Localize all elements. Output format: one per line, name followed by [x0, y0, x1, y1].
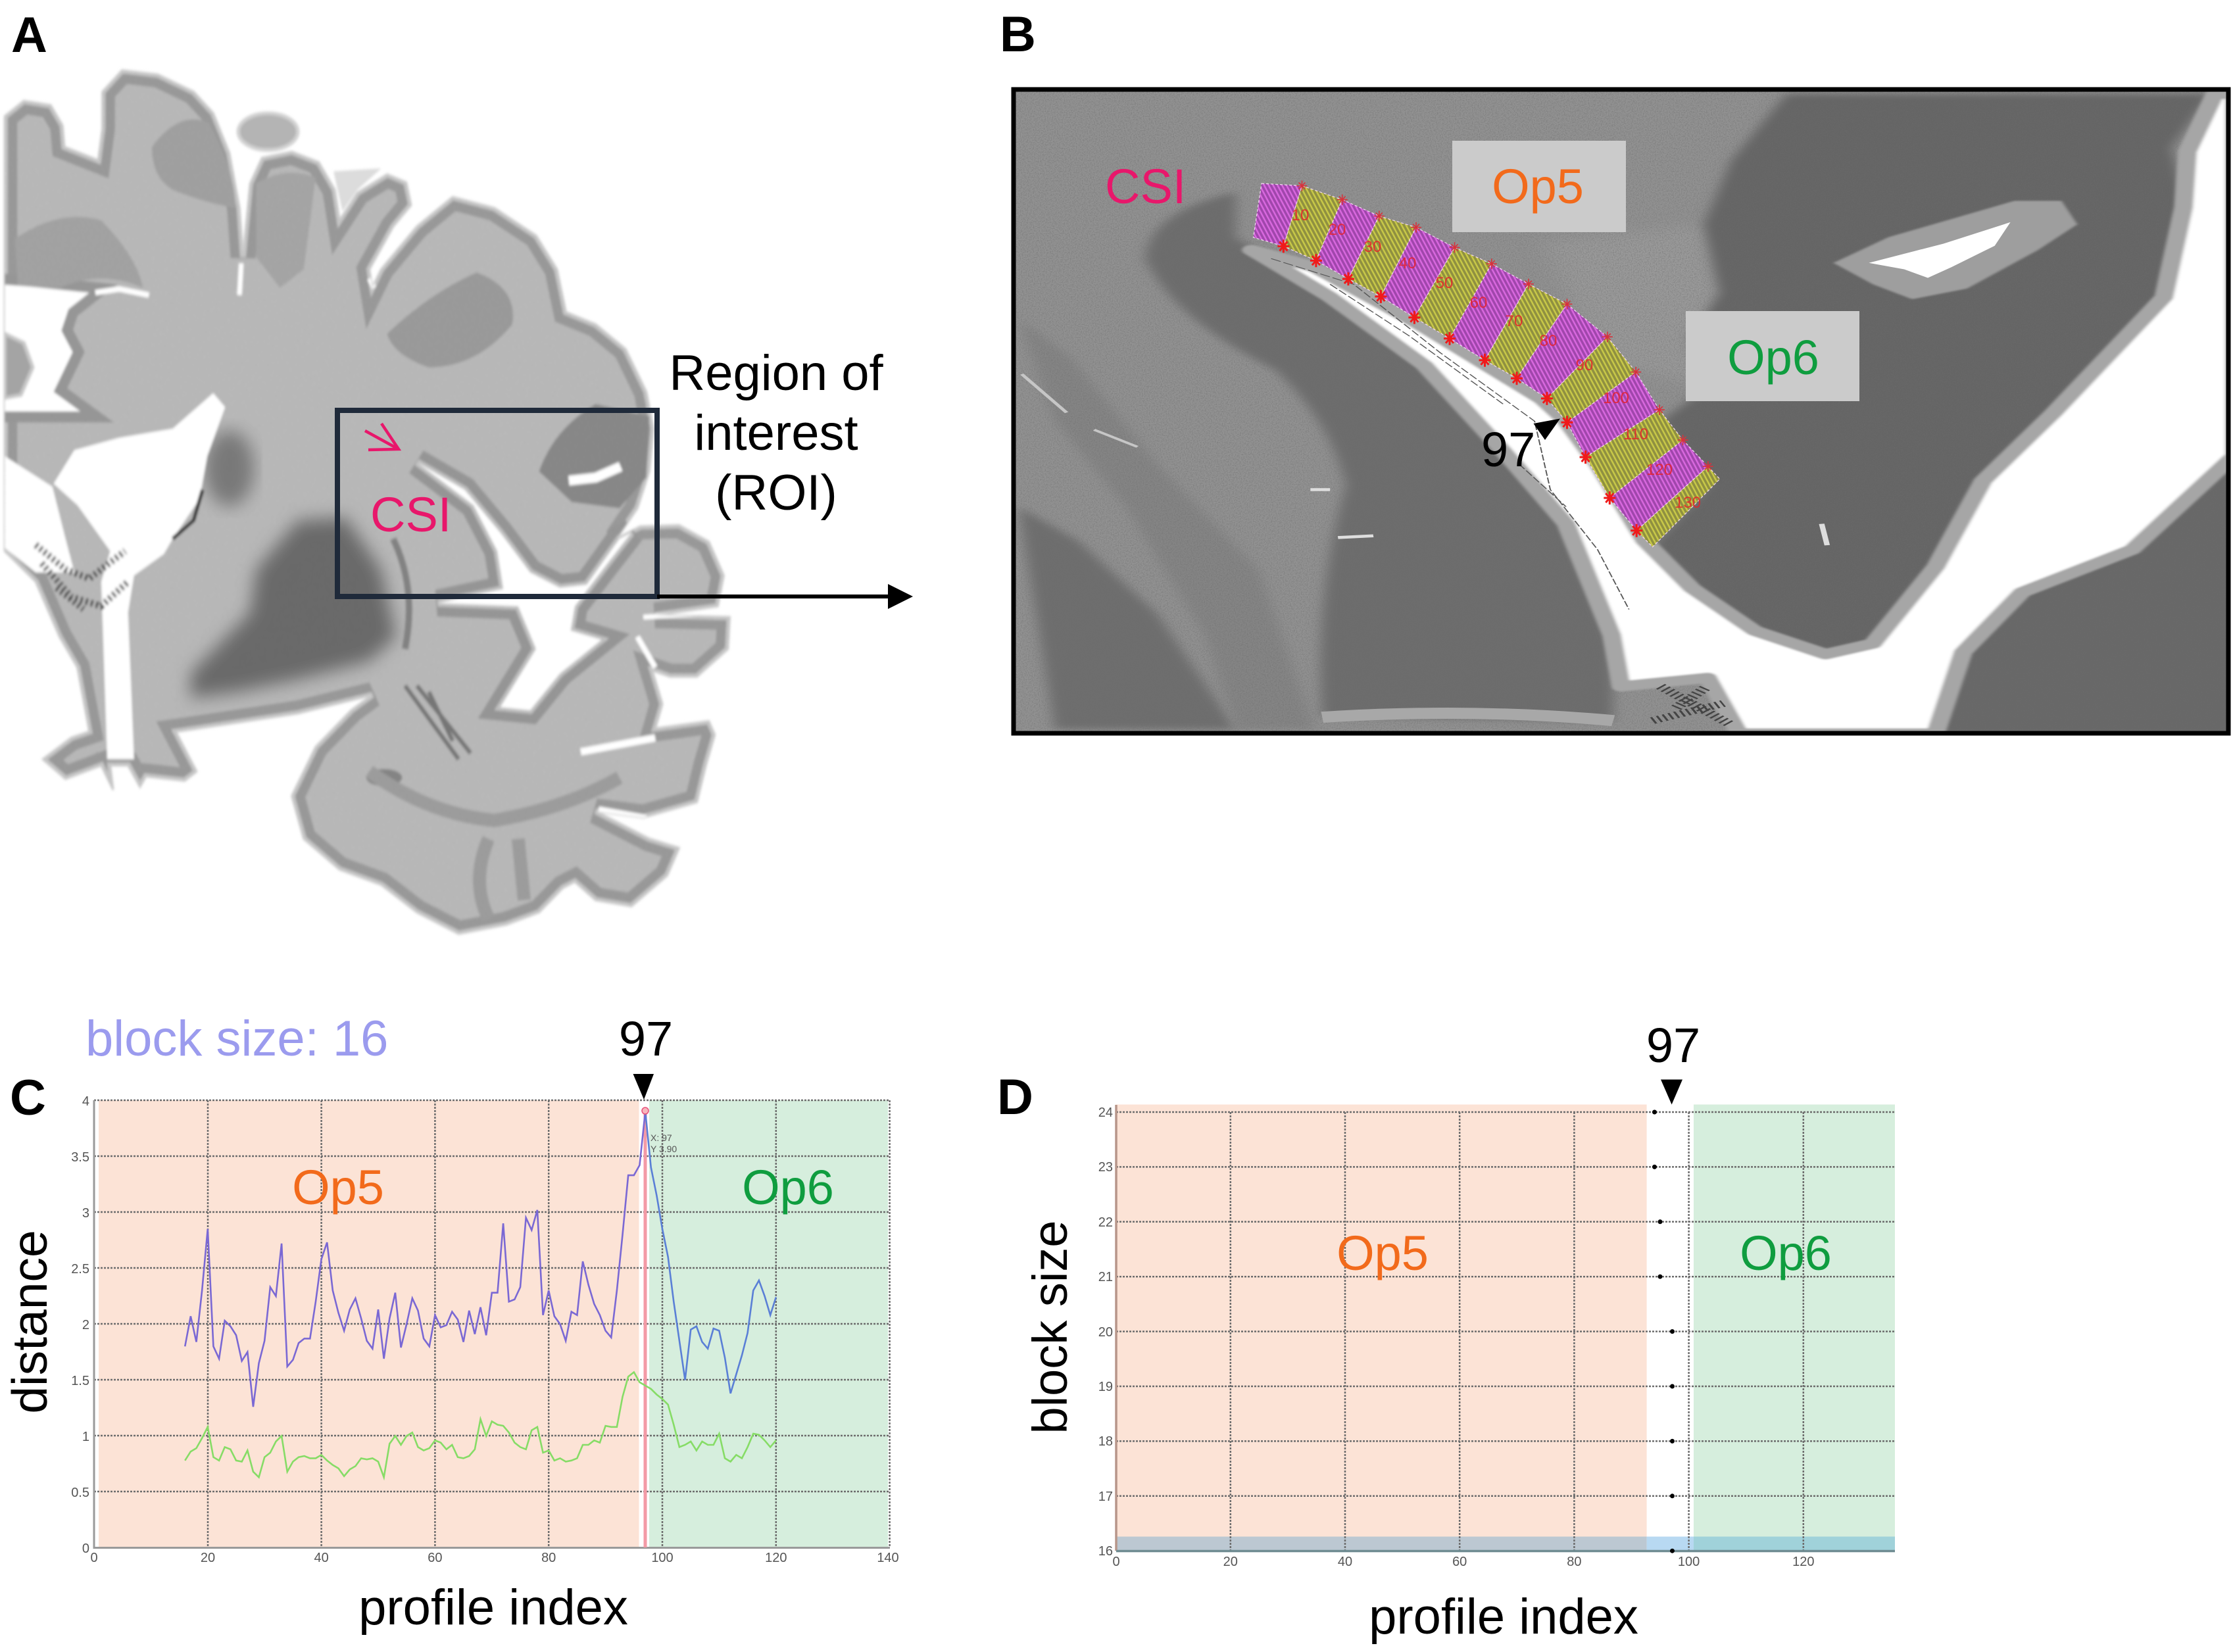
y tick labels: 2	[82, 1318, 89, 1332]
y axis title: distance	[2, 1230, 57, 1414]
y tick labels	[71, 1094, 89, 1556]
stripe index numbers: 130	[1675, 494, 1701, 512]
y tick labels: 20	[1098, 1325, 1113, 1340]
peak data tip: X: 97	[650, 1132, 672, 1143]
y tick labels: 16	[1098, 1544, 1113, 1559]
label: CSI: CSI	[1105, 159, 1186, 214]
label box: Op5	[1452, 141, 1626, 232]
profile stripes overlay	[1254, 183, 1720, 547]
peak data tip: Y 3.90	[650, 1144, 677, 1154]
panel C: distance versus profile index chart	[2, 1011, 899, 1636]
x tick labels: 0	[90, 1551, 98, 1565]
peak marker	[642, 1107, 649, 1114]
stripe index numbers: 40	[1399, 255, 1416, 272]
label box: Op5: Op5	[1492, 159, 1584, 214]
blue distance line, Op6 side	[645, 1111, 776, 1394]
Op5 region shading	[99, 1100, 639, 1547]
x tick labels: 120	[765, 1551, 787, 1565]
x tick labels: 60	[1452, 1555, 1467, 1569]
stripe index numbers: 70	[1506, 312, 1523, 330]
label: 97 with pointer	[619, 1011, 673, 1100]
stripe index numbers: 10	[1292, 206, 1309, 224]
x axis title: profile index	[358, 1580, 628, 1636]
y tick labels: 3.5	[71, 1150, 89, 1165]
panel letter C: C	[10, 1070, 46, 1126]
region label: Op5: Op5	[1337, 1226, 1429, 1280]
magnified histology image	[1014, 89, 2233, 733]
panel letter A: A	[11, 7, 47, 63]
region label: Op6: Op6	[1740, 1226, 1832, 1280]
label: Region of interest (ROI): (ROI)	[715, 465, 837, 521]
blue distance line, Op5 side	[185, 1111, 645, 1407]
y axis title: block size	[1023, 1221, 1077, 1434]
stripe index numbers: 60	[1470, 294, 1487, 312]
label: CSI: CSI	[370, 487, 451, 542]
x tick labels	[90, 1551, 899, 1565]
stripe index numbers: 80	[1540, 332, 1557, 350]
panel letter B: B	[1000, 7, 1036, 62]
label: Region of interest (ROI): Region of	[669, 345, 884, 401]
chart axes	[94, 1100, 890, 1548]
region label: Op5: Op5	[292, 1160, 384, 1215]
x tick labels: 100	[651, 1551, 674, 1565]
stripe index numbers: 110	[1623, 425, 1648, 443]
Op5 region shading	[1116, 1105, 1647, 1551]
y tick labels: 0.5	[71, 1486, 89, 1500]
label box: Op6	[1686, 311, 1859, 401]
stripe index numbers: 30	[1364, 238, 1381, 256]
label box: Op6: Op6	[1727, 330, 1819, 385]
x tick labels: 100	[1678, 1555, 1700, 1569]
y tick labels: 21	[1098, 1270, 1113, 1284]
y tick labels: 17	[1098, 1490, 1113, 1504]
y tick labels: 23	[1098, 1160, 1113, 1175]
chart grid	[1116, 1112, 1895, 1551]
panel B frame	[1014, 89, 2228, 733]
x tick labels: 0	[1112, 1555, 1120, 1569]
x tick labels: 20	[1223, 1555, 1238, 1569]
stripe index numbers	[1292, 206, 1701, 512]
x tick labels: 140	[877, 1551, 899, 1565]
panel A: brain section with region of interest	[0, 7, 913, 949]
stripe index numbers: 90	[1576, 356, 1593, 374]
stripe index numbers: 20	[1329, 221, 1346, 239]
chart axes	[1116, 1105, 1895, 1551]
arrow to panel B	[657, 584, 913, 609]
region label: Op6: Op6	[742, 1160, 834, 1215]
y tick labels	[1098, 1105, 1113, 1559]
label: 97 with pointer: 97	[1481, 422, 1535, 477]
border location dots	[1652, 1110, 1675, 1553]
x tick labels: 20	[201, 1551, 215, 1565]
stripe index numbers: 120	[1646, 461, 1673, 479]
stripe index numbers: 100	[1603, 389, 1629, 407]
x tick labels: 80	[541, 1551, 556, 1565]
highlighted bottom strip at block size 16	[1116, 1536, 1895, 1551]
x axis title: profile index	[1369, 1589, 1638, 1645]
y tick labels: 4	[82, 1094, 89, 1109]
label: 97 with pointer: 97	[1646, 1018, 1700, 1073]
y tick labels: 0	[82, 1542, 89, 1556]
Op6 region shading	[649, 1100, 888, 1547]
brain section image	[0, 61, 745, 949]
y tick labels: 3	[82, 1206, 89, 1221]
x tick labels: 40	[314, 1551, 329, 1565]
y tick labels: 1	[82, 1430, 89, 1444]
green distance line	[185, 1372, 776, 1477]
x tick labels: 40	[1338, 1555, 1352, 1569]
y tick labels: 1.5	[71, 1374, 89, 1388]
Op6 region shading	[1694, 1105, 1895, 1551]
panel D: block size versus profile index chart	[997, 1018, 1895, 1645]
x tick labels: 80	[1567, 1555, 1582, 1569]
border marker line at 97	[643, 1109, 647, 1547]
label: Region of interest (ROI): interest	[694, 405, 858, 461]
chart grid	[94, 1100, 890, 1547]
label: block size 16: block size: 16	[86, 1011, 388, 1067]
label: 97 with pointer	[1481, 418, 1560, 477]
y tick labels: 18	[1098, 1434, 1113, 1449]
panel letter D: D	[997, 1069, 1033, 1125]
x tick labels	[1112, 1555, 1814, 1569]
peak data tip	[650, 1132, 677, 1154]
panel B: magnified region of interest with profile stripes	[1000, 7, 2233, 733]
icon: pink arrow marking CSI	[365, 424, 399, 450]
x tick labels: 60	[428, 1551, 443, 1565]
y tick labels: 22	[1098, 1215, 1113, 1230]
label: 97 with pointer: 97	[619, 1011, 673, 1066]
label: 97 with pointer	[1646, 1018, 1700, 1105]
region of interest box	[337, 410, 657, 596]
y tick labels: 2.5	[71, 1262, 89, 1276]
red star markers	[1277, 180, 1713, 537]
y tick labels: 24	[1098, 1105, 1113, 1120]
x tick labels: 120	[1792, 1555, 1814, 1569]
y tick labels: 19	[1098, 1380, 1113, 1394]
stripe index numbers: 50	[1436, 274, 1453, 292]
